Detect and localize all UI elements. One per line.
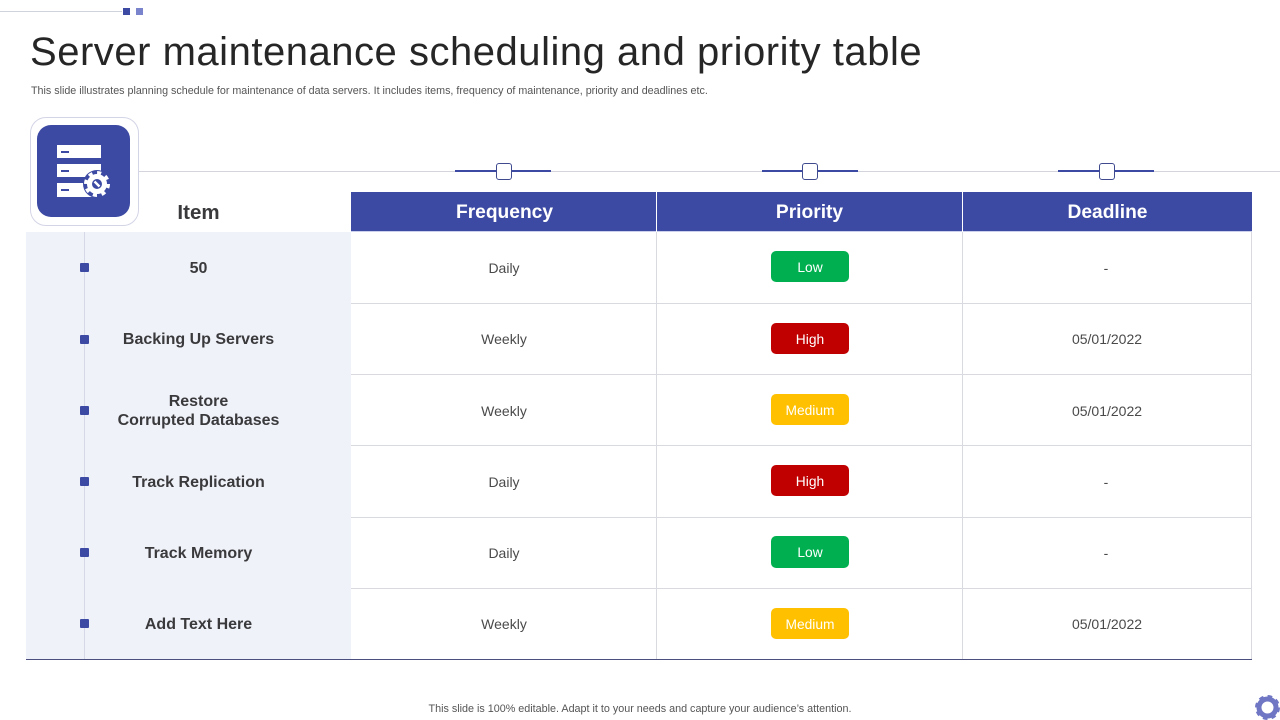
row 4 priority: High [796,474,824,489]
row 1 priority: Low [797,260,823,275]
row 6 frequency: Weekly [481,616,527,632]
row 1 item: 50 [190,260,207,277]
row 4 priority [771,465,849,496]
title: Server maintenance scheduling and priority table [30,30,922,74]
row 1 frequency: Daily [488,260,520,276]
slider marker: deadline [1058,163,1154,180]
row 2 marker [80,335,89,344]
item column timeline [84,232,85,659]
row 3 priority: Medium [785,403,835,418]
row 1 priority [771,251,849,282]
row 1 deadline: - [1104,260,1108,276]
row 4 item: Track Replication [132,474,265,491]
row 3 deadline: 05/01/2022 [1072,403,1142,419]
row 6 deadline: 05/01/2022 [1072,616,1142,632]
row 4 frequency: Daily [488,474,520,490]
row 2 priority: High [796,332,824,347]
heading: priority: Priority [776,202,843,223]
row 4 marker [80,477,89,486]
slider marker: frequency [455,163,551,180]
row 1 marker [80,263,89,272]
slider marker: priority [762,163,858,180]
row 5 priority [771,536,849,568]
heading: deadline: Deadline [1068,202,1147,223]
table bottom border [26,659,1252,660]
row 5 frequency: Daily [488,545,520,561]
row 5 priority: Low [797,545,823,560]
row 3 marker [80,406,89,415]
table grid [351,232,1252,659]
row 3 priority [771,394,849,425]
footer note: This slide is 100% editable. Adapt it to your needs and capture your audience’s attention. [429,703,851,715]
row 2 frequency: Weekly [481,331,527,347]
row 6 marker [80,619,89,628]
top decoration [0,8,143,15]
heading: frequency: Frequency [456,202,553,223]
row 5 marker [80,548,89,557]
heading: deadline [963,192,1252,232]
row 3 frequency: Weekly [481,403,527,419]
row 6 item: Add Text Here [145,616,252,633]
row 4 deadline: - [1104,474,1108,490]
subtitle: This slide illustrates planning schedule for maintenance of data servers. It includes items, frequency of maintenance, priority and deadlines etc. [31,85,708,97]
row 2 deadline: 05/01/2022 [1072,331,1142,347]
row 3 item: Restore Corrupted Databases [118,393,279,429]
heading: frequency [351,192,656,232]
heading: priority [657,192,962,232]
row 6 priority: Medium [785,617,835,632]
icon: gear [1255,695,1280,720]
icon: server maintenance badge [30,117,139,226]
row 5 item: Track Memory [145,545,252,562]
row 2 priority [771,323,849,354]
row 2 item: Backing Up Servers [123,331,274,348]
row 5 deadline: - [1104,545,1108,561]
heading: item: Item [177,201,220,224]
panel: item column background [26,232,351,659]
header rule [138,171,1280,172]
row 6 priority [771,608,849,639]
